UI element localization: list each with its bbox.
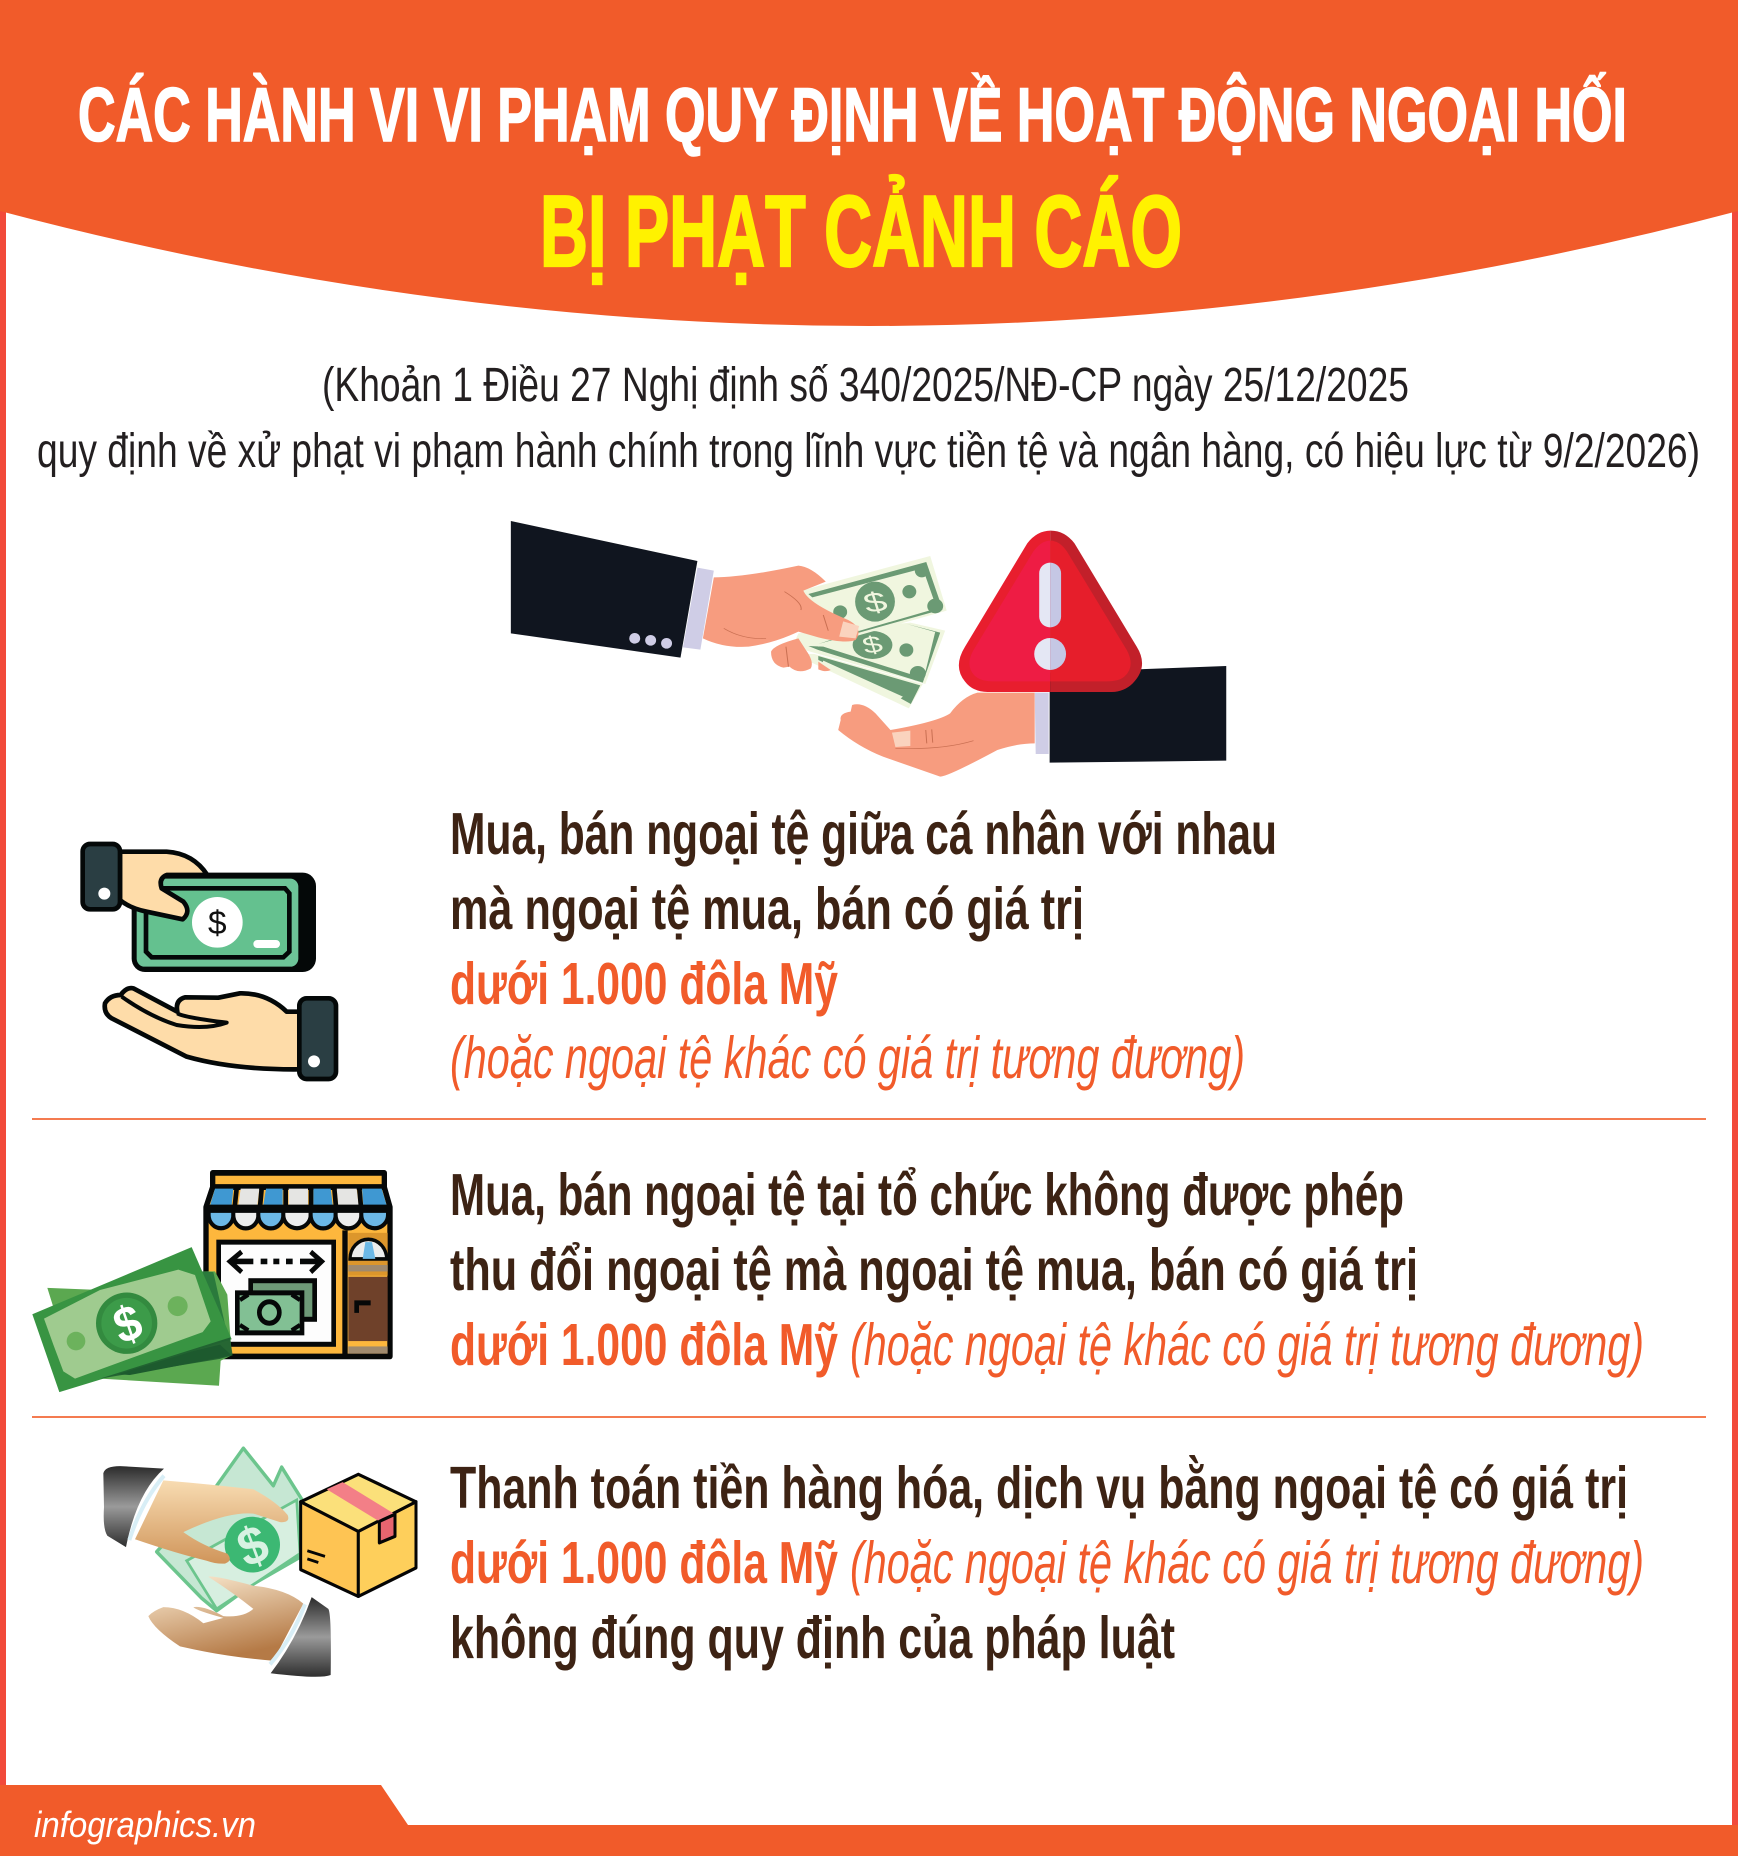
text: row 3: không đúng quy định của pháp luật (450, 1605, 1175, 1671)
panel: row 2 (32, 1162, 1644, 1392)
shop (206, 1173, 390, 1356)
lower sleeve (271, 1597, 331, 1677)
banknotes (157, 1448, 303, 1611)
giving hand (703, 566, 859, 671)
title (78, 73, 1627, 288)
money bills (792, 556, 947, 708)
text: row 1 (450, 801, 1277, 1091)
title: BỊ PHẠT CẢNH CÁO (540, 175, 1182, 288)
footer bar (0, 1785, 1738, 1856)
text: row 1: dưới 1.000 đôla Mỹ (450, 951, 838, 1017)
icon: exchange shop with banknotes (32, 1173, 390, 1392)
footer source: infographics.vn (34, 1804, 256, 1845)
text: row 1: Mua, bán ngoại tệ giữa cá nhân với nhau (450, 801, 1277, 867)
text: row 1: mà ngoại tệ mua, bán có giá trị (450, 876, 1084, 942)
icon: hands exchanging money and parcel (103, 1448, 416, 1677)
icon: hands passing a banknote (83, 844, 336, 1079)
text: row 2 (450, 1162, 1644, 1378)
banknotes: $ (107, 1293, 149, 1355)
panel: row 1 (83, 801, 1277, 1091)
panel: row 3 (103, 1448, 1644, 1677)
subtitle: legal reference (37, 359, 1700, 478)
subtitle: legal reference: (Khoản 1 Điều 27 Nghị định số 340/2025/NĐ-CP ngày 25/12/2025 (322, 359, 1409, 412)
right sleeve (1035, 666, 1226, 763)
text: row 2: dưới 1.000 đôla Mỹ (450, 1312, 838, 1378)
icon: red warning triangle (959, 531, 1142, 692)
banknotes: $ (229, 1512, 276, 1579)
illustration: hands exchanging money with warning sign (511, 521, 1226, 777)
text: row 3: dưới 1.000 đôla Mỹ (450, 1530, 838, 1596)
money bills: $ (859, 631, 886, 659)
banknotes (32, 1247, 233, 1392)
money bills: $ (860, 587, 891, 619)
receiving hand (838, 693, 1035, 777)
upper hand (129, 1476, 288, 1564)
text: row 3 (450, 1455, 1644, 1671)
left sleeve (511, 521, 714, 658)
lower hand (148, 1577, 305, 1664)
parcel box (301, 1474, 416, 1596)
text: row 2: thu đổi ngoại tệ mà ngoại tệ mua, bán có giá trị (450, 1237, 1418, 1303)
upper sleeve (103, 1466, 164, 1547)
text: row 1: (hoặc ngoại tệ khác có giá trị tương đương) (450, 1025, 1245, 1091)
icon: hands passing a banknote: $ (208, 905, 227, 942)
header banner (0, 0, 1738, 326)
